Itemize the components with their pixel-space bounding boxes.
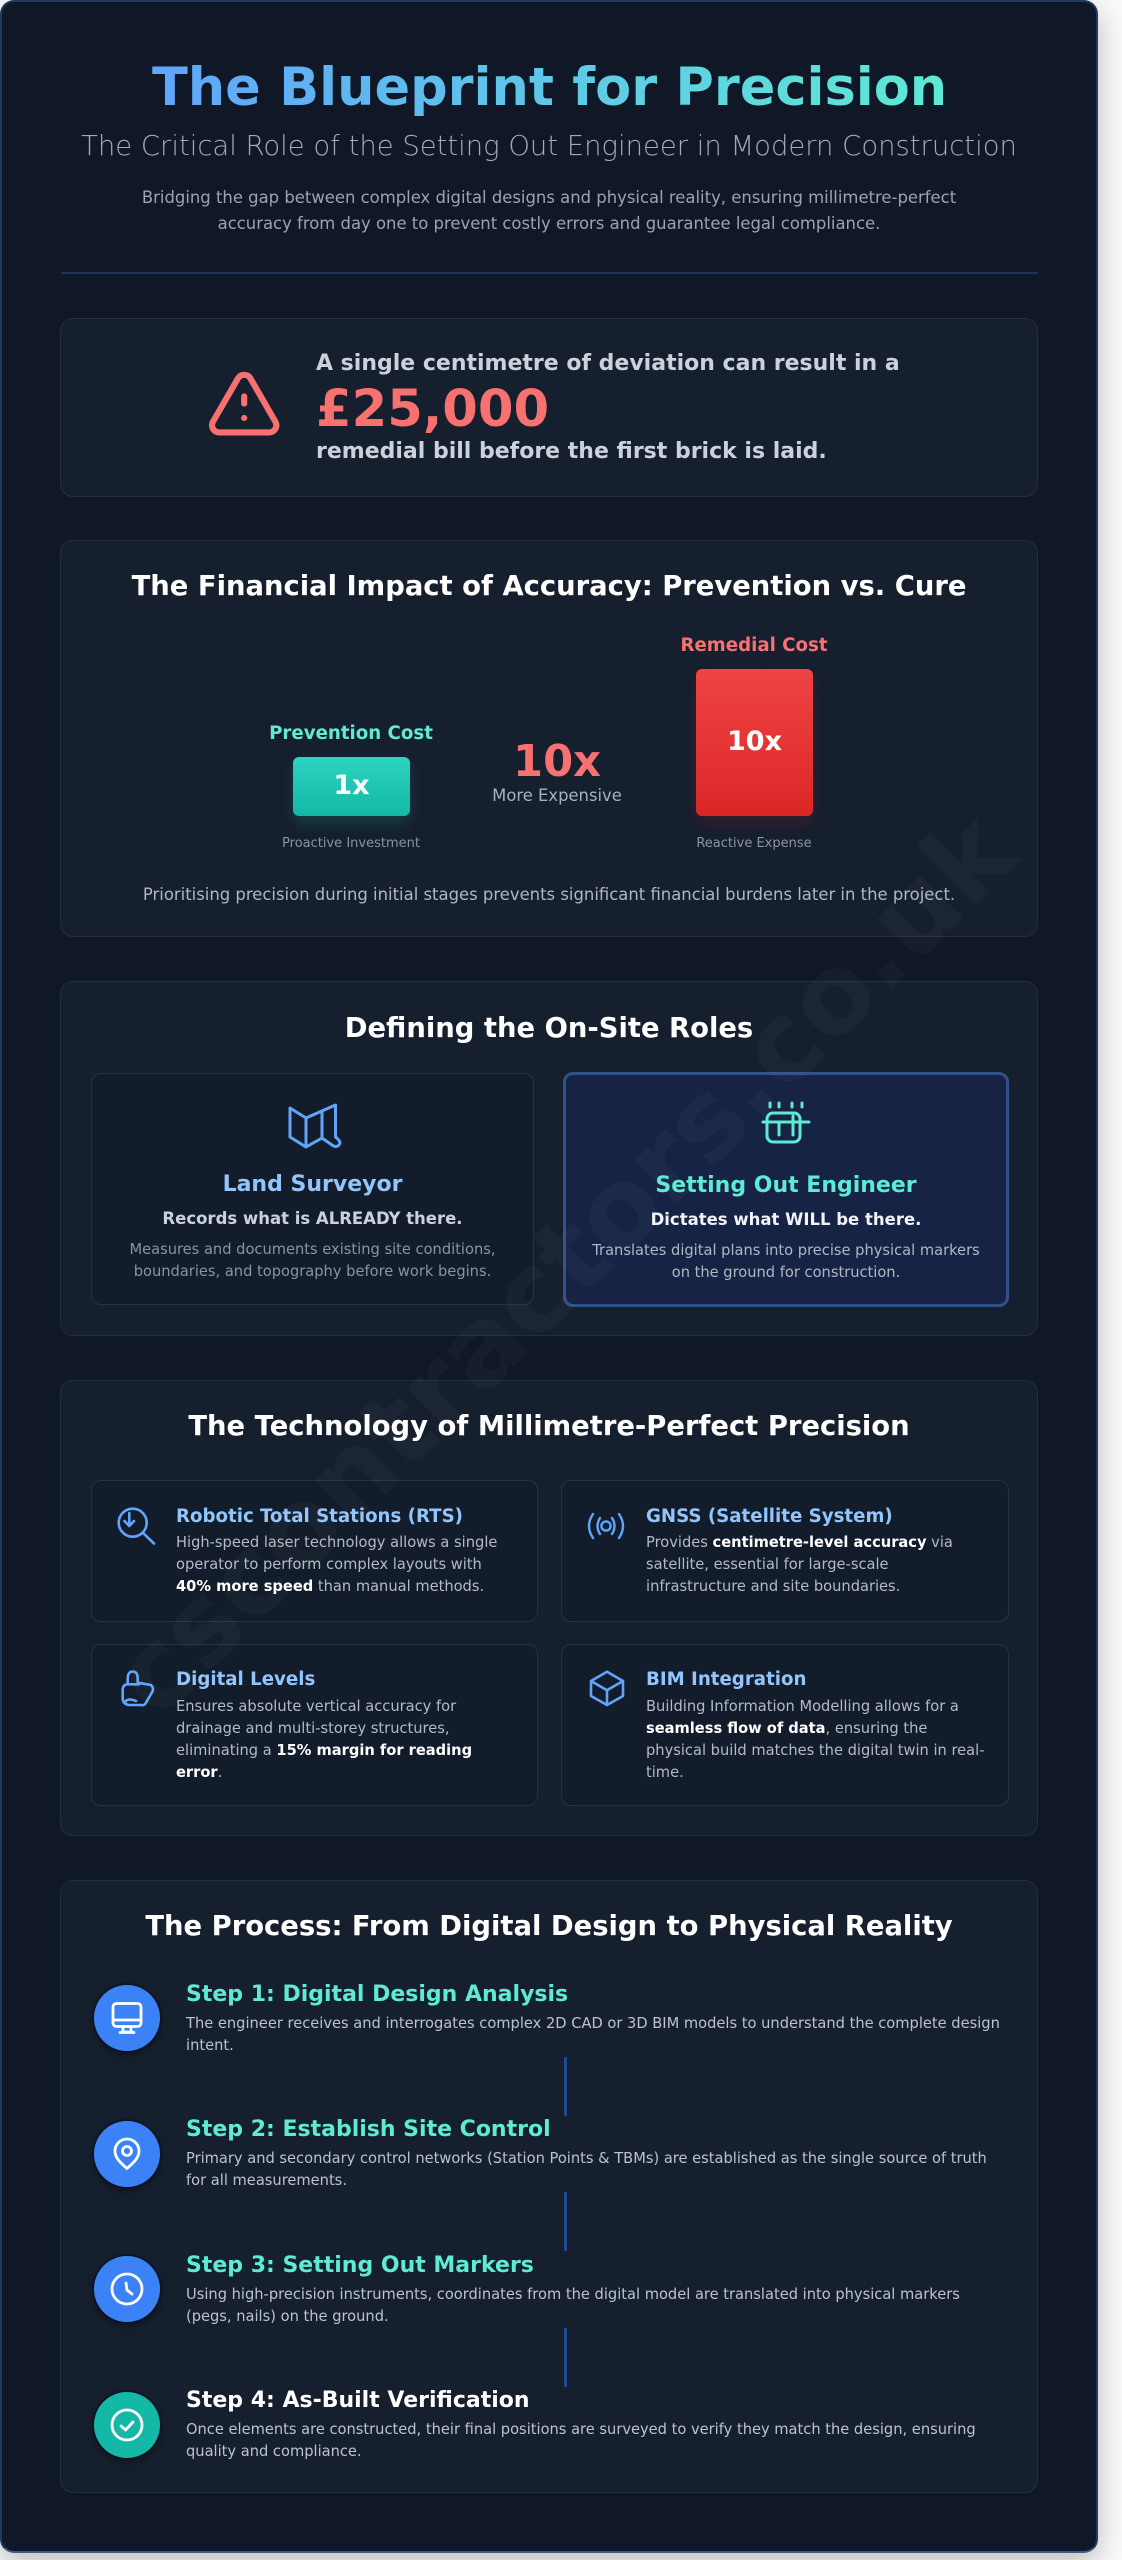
card: setting out engineer bbox=[563, 1072, 1009, 1307]
icon: setting out bbox=[762, 1102, 810, 1144]
icon: digital level bbox=[121, 1670, 154, 1706]
prevention caption: Proactive Investment bbox=[282, 836, 420, 851]
step text: Primary and secondary control networks (Station Points & TBMs) are established as the single source of truth bbox=[186, 2150, 987, 2167]
step text: Using high-precision instruments, coordinates from the digital model are translated into physical markers bbox=[186, 2286, 960, 2303]
step 2 bbox=[92, 2117, 987, 2190]
title: The Blueprint for Precision bbox=[152, 57, 947, 118]
panel: process bbox=[60, 1880, 1038, 2493]
step text: The engineer receives and interrogates complex 2D CAD or 3D BIM models to understand the complete design bbox=[186, 2015, 1000, 2032]
tech description: 40% more speed than manual methods. bbox=[176, 1578, 484, 1595]
step title: Step 1: Digital Design Analysis bbox=[186, 1982, 568, 2007]
tech description: Building Information Modelling allows for a bbox=[646, 1698, 959, 1715]
role description: on the ground for construction. bbox=[672, 1264, 900, 1281]
bar: prevention 1x: 1x bbox=[333, 770, 370, 801]
step text: quality and compliance. bbox=[186, 2443, 362, 2460]
intro text: accuracy from day one to prevent costly errors and guarantee legal compliance. bbox=[218, 214, 880, 233]
card: land surveyor bbox=[91, 1073, 534, 1305]
watermark: cscontractors.co.uk bbox=[87, 788, 1039, 1740]
heading: The Financial Impact of Accuracy: Prevention vs. Cure bbox=[132, 571, 966, 602]
heading: The Process: From Digital Design to Physical Reality bbox=[145, 1911, 953, 1942]
icon: warning triangle bbox=[208, 372, 280, 436]
bar: remedial 10x: 10x bbox=[727, 726, 782, 757]
role description: boundaries, and topography before work begins. bbox=[134, 1263, 491, 1280]
role summary: Records what is ALREADY there. bbox=[162, 1209, 463, 1228]
tech description: eliminating a 15% margin for reading bbox=[176, 1742, 472, 1759]
tech description: Provides centimetre-level accuracy via bbox=[646, 1534, 953, 1551]
tech description: physical build matches the digital twin in real- bbox=[646, 1742, 985, 1759]
bar: prevention 1x bbox=[293, 757, 410, 816]
role summary: Dictates what WILL be there. bbox=[651, 1210, 921, 1229]
icon: computer bbox=[94, 1985, 160, 2051]
prevention label: Prevention Cost bbox=[269, 723, 433, 744]
tech description: operator to perform complex layouts with bbox=[176, 1556, 482, 1573]
icon: signal bbox=[588, 1512, 624, 1540]
tech description: time. bbox=[646, 1764, 684, 1781]
tech description bbox=[176, 1698, 472, 1781]
tech description: error. bbox=[176, 1764, 222, 1781]
panel: financial impact bbox=[60, 540, 1038, 937]
chart takeaway: Prioritising precision during initial stages prevents significant financial burdens later in the project. bbox=[143, 885, 955, 904]
tech description: Ensures absolute vertical accuracy for bbox=[176, 1698, 456, 1715]
role description bbox=[129, 1241, 496, 1280]
alert lead line: A single centimetre of deviation can result in a bbox=[316, 351, 900, 376]
multiplier callout bbox=[492, 737, 622, 805]
role name: Setting Out Engineer bbox=[655, 1173, 917, 1198]
multiplier value: 10x bbox=[513, 737, 601, 787]
step text: for all measurements. bbox=[186, 2172, 347, 2189]
heading: The Technology of Millimetre-Perfect Precision bbox=[188, 1411, 910, 1442]
tech name: Robotic Total Stations (RTS) bbox=[176, 1506, 463, 1527]
step title: Step 4: As-Built Verification bbox=[186, 2388, 530, 2413]
multiplier caption: More Expensive bbox=[492, 786, 622, 805]
step text bbox=[186, 2286, 960, 2325]
card: robotic total stations bbox=[91, 1480, 538, 1622]
tech name: GNSS (Satellite System) bbox=[646, 1506, 893, 1527]
panel: cost alert bbox=[60, 318, 1038, 497]
step title: Step 3: Setting Out Markers bbox=[186, 2253, 534, 2278]
step title: Step 2: Establish Site Control bbox=[186, 2117, 551, 2142]
role description bbox=[592, 1242, 980, 1281]
icon: check circle bbox=[94, 2392, 160, 2458]
step 1 bbox=[92, 1982, 1000, 2054]
step text bbox=[186, 2150, 987, 2189]
icon: cube bbox=[590, 1670, 624, 1706]
icon: map bbox=[288, 1104, 342, 1148]
tech description: High-speed laser technology allows a single bbox=[176, 1534, 497, 1551]
role description: Translates digital plans into precise physical markers bbox=[592, 1242, 980, 1259]
tech name: BIM Integration bbox=[646, 1669, 806, 1690]
tech description bbox=[176, 1534, 497, 1595]
card: gnss bbox=[561, 1480, 1009, 1622]
intro text: Bridging the gap between complex digital designs and physical reality, ensuring millimetre-perfect bbox=[142, 188, 956, 207]
tech description: infrastructure and site boundaries. bbox=[646, 1578, 900, 1595]
icon: location pin bbox=[94, 2121, 160, 2187]
tech description: seamless flow of data, ensuring the bbox=[646, 1720, 927, 1737]
role name: Land Surveyor bbox=[223, 1172, 402, 1197]
tech description: drainage and multi-storey structures, bbox=[176, 1720, 450, 1737]
tech name: Digital Levels bbox=[176, 1669, 315, 1690]
step text: intent. bbox=[186, 2037, 234, 2054]
alert text bbox=[316, 351, 900, 464]
step 3 bbox=[92, 2253, 960, 2326]
alert figure: £25,000 bbox=[316, 379, 549, 439]
remedial caption: Reactive Expense bbox=[696, 836, 812, 851]
tech description bbox=[646, 1534, 953, 1595]
tech description bbox=[646, 1698, 985, 1781]
step text: Once elements are constructed, their final positions are surveyed to verify they match the design, ensuring bbox=[186, 2421, 976, 2438]
intro text bbox=[142, 188, 956, 233]
subtitle: The Critical Role of the Setting Out Engineer in Modern Construction bbox=[81, 131, 1017, 162]
icon: magnifier bbox=[117, 1507, 156, 1545]
role description: Measures and documents existing site conditions, bbox=[129, 1241, 496, 1258]
step 4 bbox=[92, 2388, 976, 2462]
bar: remedial 10x bbox=[696, 669, 813, 816]
icon: clock bbox=[94, 2256, 160, 2322]
tech description: satellite, essential for large-scale bbox=[646, 1556, 889, 1573]
remedial label: Remedial Cost bbox=[680, 635, 828, 656]
header bbox=[61, 57, 1038, 274]
panel: on-site roles bbox=[60, 981, 1038, 1336]
panel: technology bbox=[60, 1380, 1038, 1836]
step text bbox=[186, 2015, 1000, 2054]
bar chart: prevention vs remedial bbox=[269, 635, 828, 851]
card: digital levels bbox=[91, 1644, 538, 1806]
step text: (pegs, nails) on the ground. bbox=[186, 2308, 389, 2325]
card: bim bbox=[561, 1644, 1009, 1806]
step text bbox=[186, 2421, 976, 2460]
heading: Defining the On-Site Roles bbox=[345, 1013, 753, 1044]
alert closing line: remedial bill before the first brick is laid. bbox=[316, 439, 827, 464]
